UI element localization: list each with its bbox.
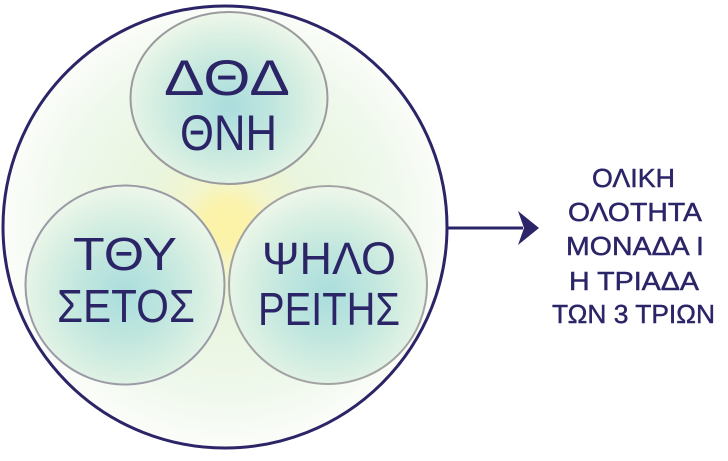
outer circle (3, 6, 447, 448)
panel: top circle (130, 12, 328, 184)
panel: left circle (26, 186, 224, 384)
diagram: three circles inside one circle (3, 6, 447, 448)
panel: right circle (229, 186, 427, 384)
label: left circle line 2: ΣΕΤΟΣ (57, 280, 195, 332)
text block: result caption: Η ΤΡΙΑΔΑ (569, 266, 700, 296)
label: right circle line 2: ΡΕΙΤΗΣ (258, 283, 400, 335)
label: top circle line 2: ΘΝΗ (180, 105, 277, 161)
text block: result caption: ΤΩΝ 3 ΤΡΙΩΝ (552, 299, 715, 329)
label: right circle line 1: ΨΗΛΟ (262, 233, 396, 284)
text block: result caption: ΜΟΝΑΔΑ Ι (566, 231, 704, 261)
label: left circle line 1: ΤΘΥ (73, 228, 177, 280)
arrow (447, 211, 539, 245)
text block: result caption (552, 163, 715, 329)
label: top circle line 1: ΔΘΔ (164, 50, 290, 106)
text block: result caption: ΟΛΟΤΗΤΑ (568, 197, 703, 227)
text block: result caption: ΟΛΙΚΗ (592, 163, 675, 193)
